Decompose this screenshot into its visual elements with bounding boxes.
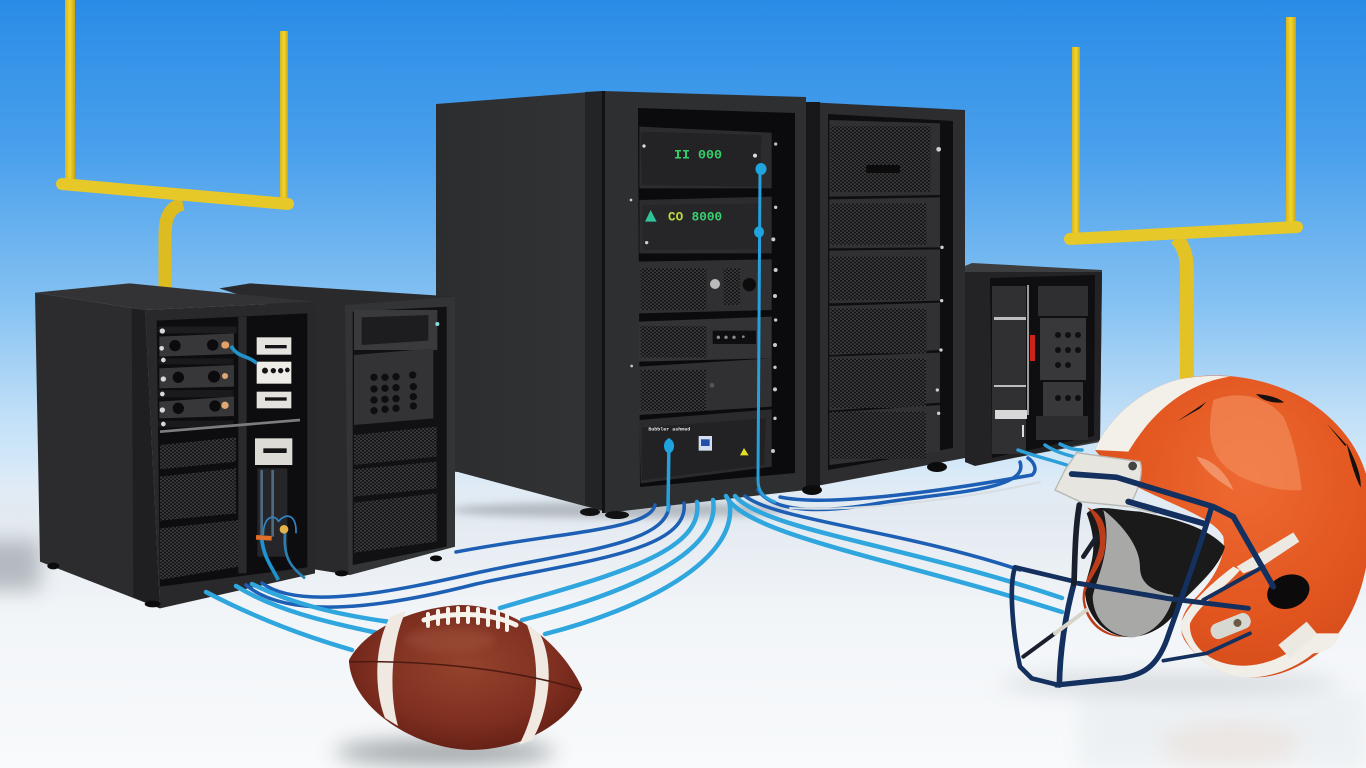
display window xyxy=(354,310,439,350)
background: blue sky gradient xyxy=(0,0,1366,510)
left goal post xyxy=(62,0,288,290)
football xyxy=(349,605,582,750)
white stripe xyxy=(1095,376,1230,452)
panel five xyxy=(829,353,940,411)
laces xyxy=(424,608,516,630)
module: mesh plain xyxy=(639,358,772,415)
helmet shell xyxy=(1095,375,1366,677)
keypad xyxy=(354,348,433,425)
white stripes xyxy=(377,611,549,745)
left rear server rack xyxy=(219,283,455,576)
white side clips xyxy=(1237,532,1317,658)
panel bolts xyxy=(936,147,944,415)
red liner xyxy=(1083,507,1125,637)
cables: dark blue left xyxy=(246,503,684,607)
cables: right to helmet xyxy=(726,496,1062,612)
module: display two: 8000 xyxy=(692,210,722,225)
cables: light blue left xyxy=(206,500,730,650)
white chin trim xyxy=(1180,567,1340,677)
right goal post xyxy=(1070,17,1297,380)
helmet interior xyxy=(1085,508,1225,637)
vents xyxy=(1177,394,1361,487)
cables: vertical from front panels xyxy=(668,172,775,510)
module: display one: II 000 xyxy=(674,148,722,163)
rack bolts xyxy=(630,199,778,453)
helmet xyxy=(1012,375,1366,685)
panel six xyxy=(829,405,940,465)
module: bottom switch xyxy=(639,409,772,483)
cables: dark blue right xyxy=(745,458,1035,570)
white connector modules xyxy=(255,337,292,465)
module: mesh with dials xyxy=(639,259,772,313)
left front server rack xyxy=(35,283,315,608)
center rack front modules xyxy=(630,127,778,483)
panel four xyxy=(829,303,940,355)
right section of center server rack xyxy=(802,102,965,495)
chin snap xyxy=(1208,611,1253,641)
blue facemask xyxy=(1012,474,1273,685)
network cables xyxy=(206,163,1082,650)
patch panel xyxy=(257,468,287,557)
seam xyxy=(349,662,582,690)
center server rack side and cabinet xyxy=(436,91,806,519)
module: bottom switch: Bubbler ashmed xyxy=(648,427,690,433)
module: mesh with ports xyxy=(639,317,772,362)
ear hole xyxy=(1262,569,1314,615)
cable: floor highlight xyxy=(790,482,1040,509)
panel one with handle slot xyxy=(829,120,940,197)
bumper plate xyxy=(1055,453,1157,513)
cable connectors xyxy=(664,163,766,453)
background: white reflective floor xyxy=(0,462,1366,768)
amplifier units xyxy=(158,327,237,427)
module: display two: CO xyxy=(668,210,684,225)
vent panels xyxy=(160,437,238,580)
module: display two xyxy=(639,197,772,253)
cables: behind helmet xyxy=(1018,444,1082,468)
divider bar xyxy=(160,420,300,432)
vents xyxy=(354,427,437,553)
panel two xyxy=(829,197,940,248)
panel three xyxy=(829,249,940,303)
far right server rack xyxy=(965,263,1102,466)
module: display one xyxy=(639,127,777,188)
inner padding xyxy=(1093,510,1173,637)
right rack mesh panels xyxy=(829,120,944,465)
ball body xyxy=(349,605,582,750)
local cables and connectors xyxy=(223,342,305,580)
shell highlights xyxy=(1197,395,1302,490)
shine xyxy=(405,628,495,652)
